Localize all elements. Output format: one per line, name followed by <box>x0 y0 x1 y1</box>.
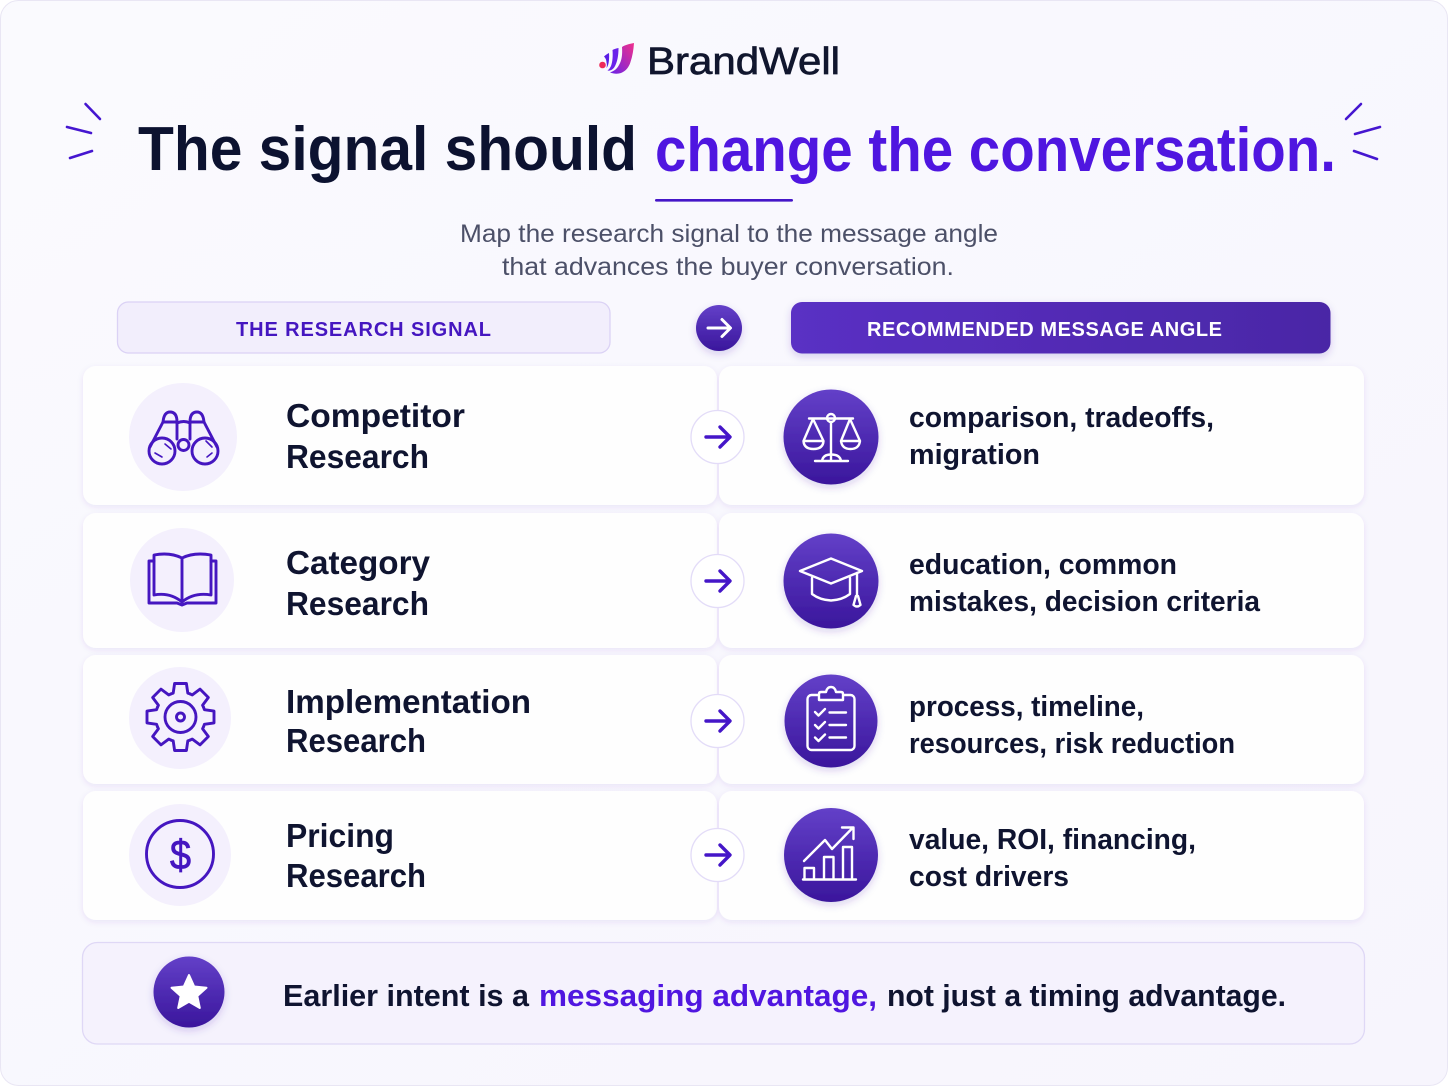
message angle <box>909 691 1235 760</box>
decorative sparks: left <box>67 104 100 158</box>
icon: dollar coin <box>129 804 231 906</box>
icon: graduation cap <box>784 534 878 628</box>
brand logo <box>599 41 840 83</box>
footer message: not just a timing advantage. <box>887 978 1286 1013</box>
message angle: mistakes, decision criteria <box>909 586 1261 618</box>
label <box>286 683 531 759</box>
subtitle: Map the research signal to the message angle <box>460 220 998 248</box>
title: The signal should <box>138 115 637 184</box>
angle card <box>719 791 1364 920</box>
arrow <box>691 828 744 882</box>
message angle: migration <box>909 439 1040 471</box>
column header: research signal <box>118 302 610 353</box>
label: Pricing <box>286 817 394 854</box>
row 3: implementation research <box>83 655 1364 784</box>
title <box>138 115 1336 185</box>
column header: message angle: RECOMMENDED MESSAGE ANGLE <box>867 319 1222 341</box>
icon: open book <box>130 528 234 632</box>
message angle: process, timeline, <box>909 691 1144 723</box>
signal card <box>83 655 717 784</box>
signal card <box>83 513 717 648</box>
arrow <box>691 554 744 608</box>
icon: star badge <box>154 956 224 1028</box>
message angle: cost drivers <box>909 861 1069 893</box>
label: Research <box>286 585 429 622</box>
label <box>286 397 465 475</box>
row 4: pricing research <box>83 791 1364 920</box>
icon: growth chart <box>784 808 878 902</box>
icon: BrandWell wing mark <box>599 43 634 74</box>
subtitle: that advances the buyer conversation. <box>502 253 954 281</box>
row 1: competitor research <box>83 366 1364 505</box>
footer message: Earlier intent is a <box>283 978 530 1013</box>
arrow <box>691 694 744 748</box>
title underline <box>655 199 793 202</box>
column header: research signal: THE RESEARCH SIGNAL <box>236 319 491 341</box>
icon: balance scales <box>784 390 878 484</box>
message angle <box>909 549 1261 618</box>
header arrow <box>696 305 742 351</box>
message angle: education, common <box>909 549 1177 581</box>
label <box>286 544 431 622</box>
label: Research <box>286 438 429 475</box>
signal card <box>83 791 717 920</box>
icon: dollar coin: $ <box>170 831 191 878</box>
row 2: category research <box>83 513 1364 648</box>
label <box>286 817 426 894</box>
message angle: value, ROI, financing, <box>909 824 1196 856</box>
label: Competitor <box>286 397 465 434</box>
message angle <box>909 824 1196 893</box>
arrow <box>691 410 744 464</box>
angle card <box>719 513 1364 648</box>
message angle: resources, risk reduction <box>909 728 1235 760</box>
angle card <box>719 655 1364 784</box>
icon: clipboard checklist <box>784 674 878 768</box>
footer message: messaging advantage, <box>539 978 877 1013</box>
angle card <box>719 366 1364 505</box>
message angle <box>909 402 1214 471</box>
footer callout <box>82 942 1364 1044</box>
signal card <box>83 366 717 505</box>
decorative sparks: right <box>1346 104 1380 159</box>
brand name: BrandWell <box>647 41 840 83</box>
title: change the conversation. <box>655 116 1336 185</box>
icon: gear <box>129 667 231 769</box>
label: Implementation <box>286 683 531 720</box>
footer message <box>283 978 1286 1013</box>
subtitle <box>460 220 998 281</box>
message angle: comparison, tradeoffs, <box>909 402 1214 434</box>
icon: binoculars <box>129 383 237 491</box>
column header: message angle <box>791 302 1330 354</box>
label: Category <box>286 544 431 581</box>
label: Research <box>286 857 426 894</box>
label: Research <box>286 722 426 759</box>
